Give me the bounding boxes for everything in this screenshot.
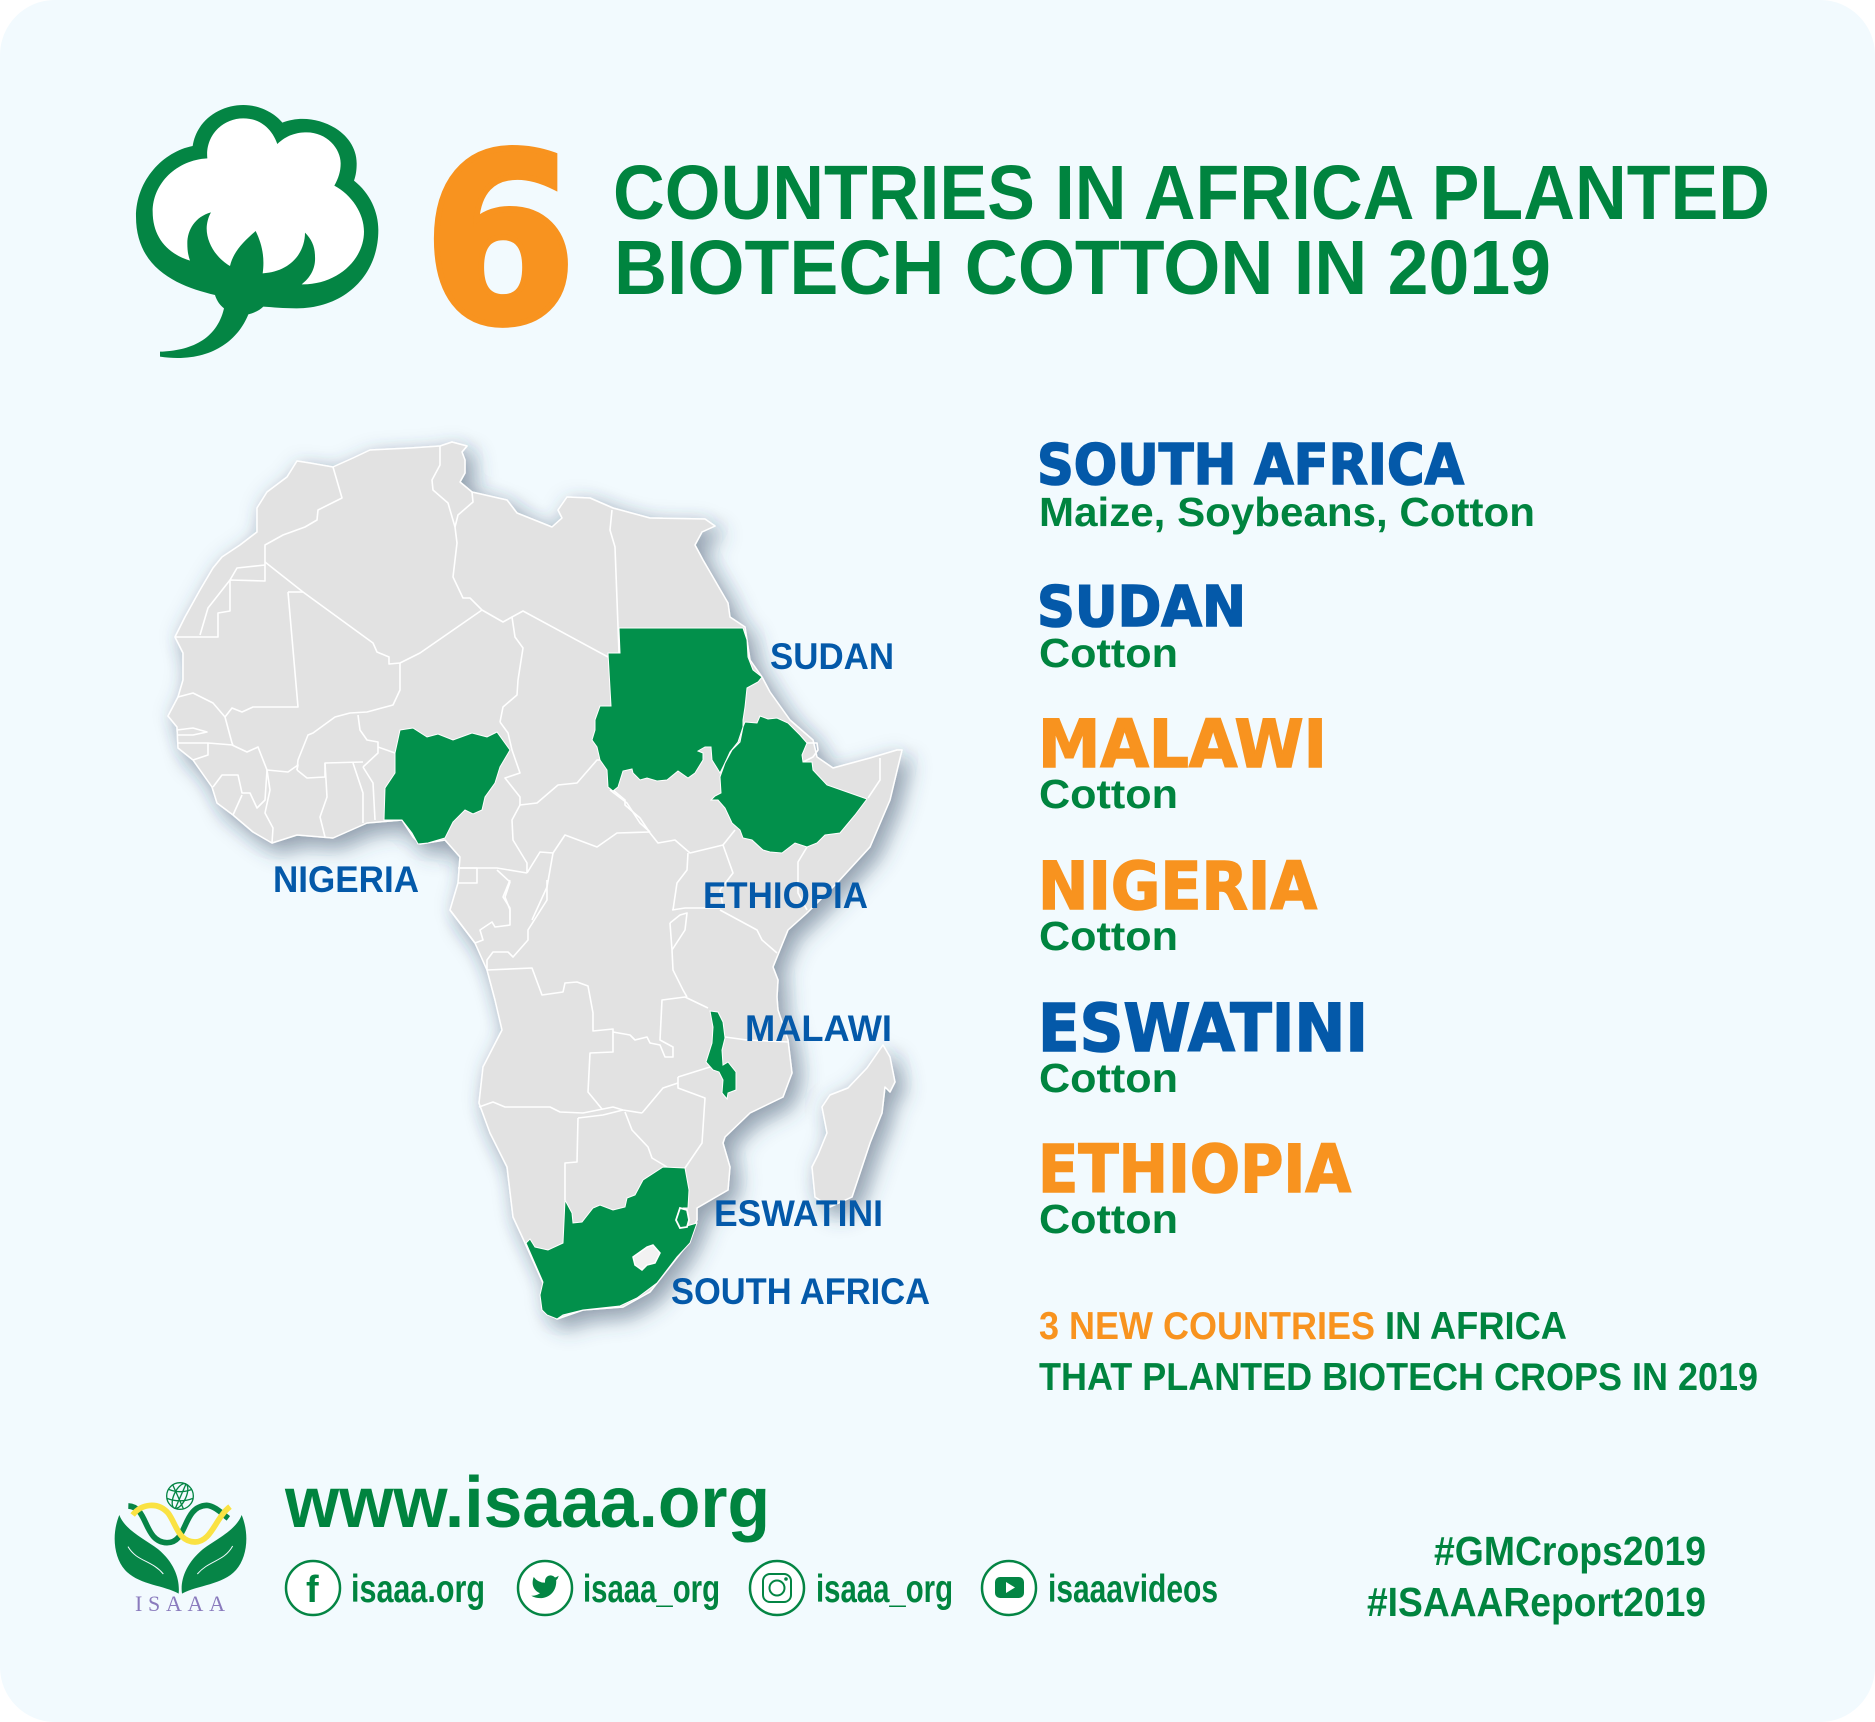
map labels: NIGERIA (273, 859, 419, 900)
map labels: ETHIOPIA (703, 875, 868, 916)
list item: Malawi: Cotton (1039, 771, 1178, 817)
list item: Nigeria: NIGERIA (1038, 848, 1317, 925)
list item: South Africa: SOUTH AFRICA (1037, 433, 1465, 498)
social: facebook: f (306, 1569, 319, 1611)
logo DNA helix (128, 1505, 228, 1543)
title: BIOTECH COTTON IN 2019 (614, 225, 1551, 311)
hashtags (1367, 1528, 1706, 1625)
social: facebook: isaaa.org (351, 1568, 485, 1611)
list item: Nigeria: Cotton (1039, 913, 1178, 959)
social: twitter (518, 1561, 720, 1615)
map: highlighted Nigeria (384, 728, 510, 844)
list item: Malawi: MALAWI (1038, 706, 1327, 783)
map: highlighted Ethiopia (711, 716, 867, 853)
map: highlighted Eswatini (676, 1208, 689, 1228)
big number 6: 6 (423, 106, 577, 378)
title (613, 150, 1770, 311)
map labels: SUDAN (770, 636, 894, 677)
list item: Malawi (1038, 706, 1327, 817)
social: instagram: isaaa_org (816, 1568, 953, 1611)
social: twitter: isaaa_org (583, 1568, 720, 1611)
logo wordmark: ISAAA (135, 1591, 225, 1616)
list item: Ethiopia (1038, 1131, 1351, 1242)
title: COUNTRIES IN AFRICA PLANTED (613, 150, 1770, 236)
list item: Eswatini (1038, 990, 1368, 1101)
list item: Sudan: Cotton (1039, 630, 1178, 676)
callout: new countries: THAT PLANTED BIOTECH CROPS IN 2019 (1039, 1356, 1758, 1399)
logo: ISAAA (115, 1481, 246, 1616)
map: country borders (175, 446, 880, 1200)
list item: Eswatini: ESWATINI (1038, 990, 1368, 1067)
list item: Ethiopia: ETHIOPIA (1038, 1131, 1351, 1208)
list item: Nigeria (1038, 848, 1317, 959)
website url: www.isaaa.org (284, 1463, 770, 1543)
icon: cotton boll (136, 105, 378, 358)
callout: new countries: IN AFRICA (1385, 1305, 1567, 1348)
country list (1037, 433, 1535, 1242)
map: Lesotho (633, 1245, 660, 1270)
callout: new countries (1039, 1305, 1758, 1399)
hashtags: #ISAAAReport2019 (1367, 1579, 1706, 1625)
map labels (273, 636, 930, 1312)
map: highlighted South Africa (526, 1167, 697, 1319)
social: youtube (982, 1561, 1218, 1615)
callout: new countries: 3 NEW COUNTRIES (1039, 1305, 1375, 1348)
list item: Sudan: SUDAN (1037, 575, 1246, 640)
social: youtube: isaaavideos (1048, 1568, 1218, 1611)
map labels: ESWATINI (714, 1193, 883, 1234)
logo globe (167, 1481, 193, 1511)
map: Madagascar (812, 1045, 895, 1207)
logo leaves (115, 1515, 179, 1594)
social: instagram (750, 1561, 953, 1615)
social: facebook (286, 1561, 485, 1615)
list item: South Africa (1037, 433, 1535, 535)
map of Africa (168, 442, 902, 1319)
list item: South Africa: Maize, Soybeans, Cotton (1039, 489, 1535, 535)
list item: Eswatini: Cotton (1039, 1055, 1178, 1101)
map labels: SOUTH AFRICA (671, 1271, 930, 1312)
list item: Sudan (1037, 575, 1246, 676)
map labels: MALAWI (745, 1008, 892, 1049)
hashtags: #GMCrops2019 (1434, 1528, 1706, 1574)
map landmass (168, 442, 902, 1319)
map: highlighted Malawi (706, 1011, 736, 1099)
list item: Ethiopia: Cotton (1039, 1196, 1178, 1242)
map: highlighted Sudan (592, 628, 762, 791)
